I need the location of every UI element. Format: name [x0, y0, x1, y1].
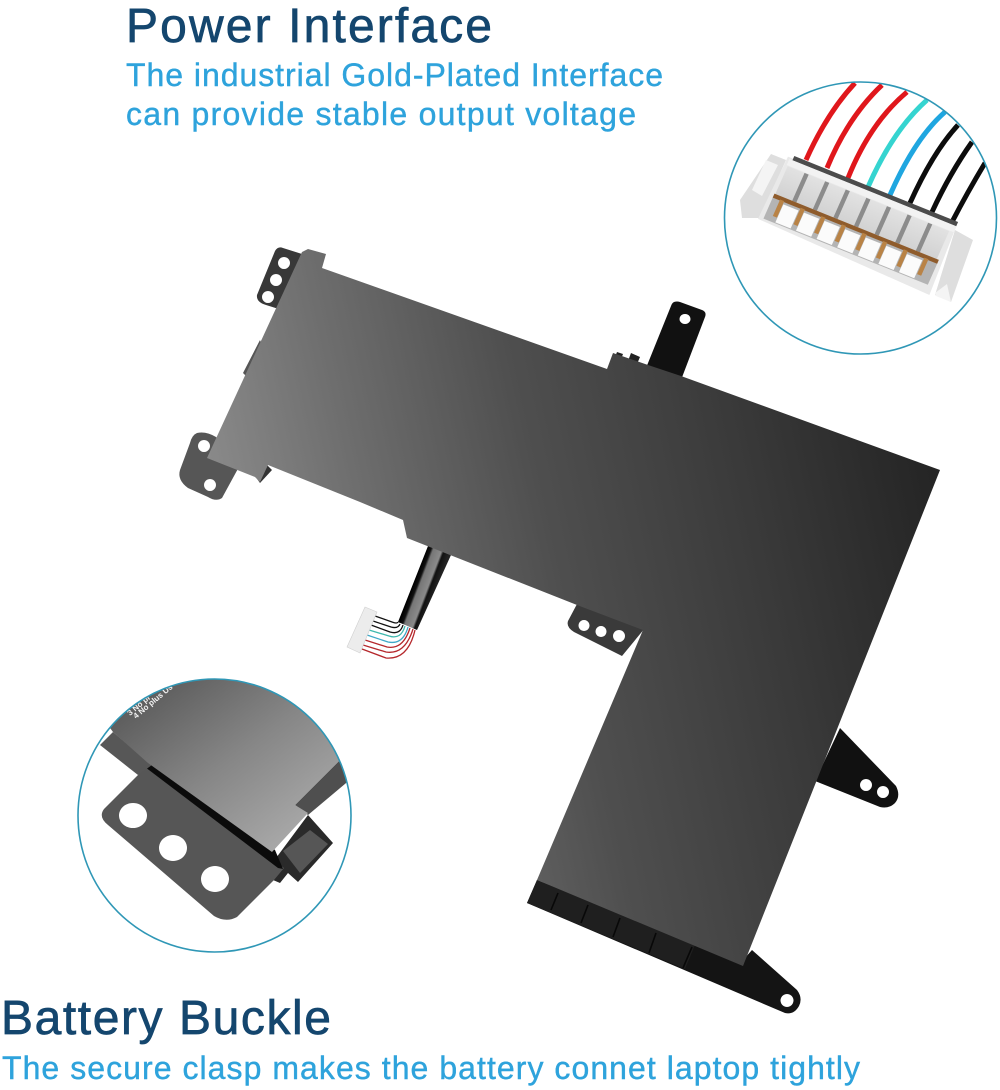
cable sleeve — [398, 546, 451, 630]
clasp box — [270, 815, 333, 883]
connector housing ends — [740, 154, 973, 302]
housing — [755, 156, 960, 295]
gold contacts — [773, 194, 939, 264]
gray battery face — [110, 680, 339, 852]
tab: top left bracket — [257, 247, 302, 310]
black slot — [145, 762, 283, 869]
subtext: gold-plated interface — [126, 57, 663, 132]
clips beside top tab — [615, 352, 640, 364]
tab: lower left bracket — [179, 432, 240, 500]
callout circle: power connector — [724, 82, 996, 354]
white rail — [787, 159, 956, 232]
heading: Battery Buckle — [1, 992, 860, 1086]
upper keys — [775, 166, 949, 259]
lower keys — [775, 204, 922, 278]
tiny label text on battery: 4 No plus Us — [132, 682, 175, 721]
circle outline — [724, 82, 996, 354]
tab: three-hole bracket beside cable — [568, 604, 645, 656]
callout circle: battery buckle — [77, 678, 352, 953]
subtext: secure clasp: The secure clasp makes the battery connet laptop tightly — [2, 1050, 860, 1086]
plate side edges — [100, 732, 152, 775]
separators — [792, 173, 932, 252]
battery illustration — [179, 247, 940, 1013]
bottom strip and bracket — [527, 880, 801, 1013]
recess behind lower keys — [763, 195, 938, 285]
side bump — [243, 340, 262, 376]
connector body in skewed coordinates — [755, 153, 961, 295]
battery body — [207, 249, 940, 966]
wires to small connector — [362, 616, 415, 658]
wires — [806, 83, 985, 222]
perforated buckle plate — [102, 766, 284, 920]
dark back bar — [792, 156, 958, 226]
subtext: gold-plated interface: The industrial Gold-Plated Interface — [126, 57, 663, 93]
heading: Power Interface — [126, 0, 663, 132]
tab: top center bracket — [646, 302, 706, 380]
notch under battery edge — [255, 464, 272, 483]
tiny label text on battery: 3 No pl — [126, 693, 152, 718]
heading: Power Interface: Power Interface — [126, 0, 492, 53]
heading: Battery Buckle: Battery Buckle — [1, 992, 331, 1045]
tab: right bracket — [815, 728, 898, 808]
subtext: gold-plated interface: can provide stable output voltage — [126, 96, 636, 132]
small white connector — [347, 607, 377, 653]
circle outline — [78, 679, 351, 952]
